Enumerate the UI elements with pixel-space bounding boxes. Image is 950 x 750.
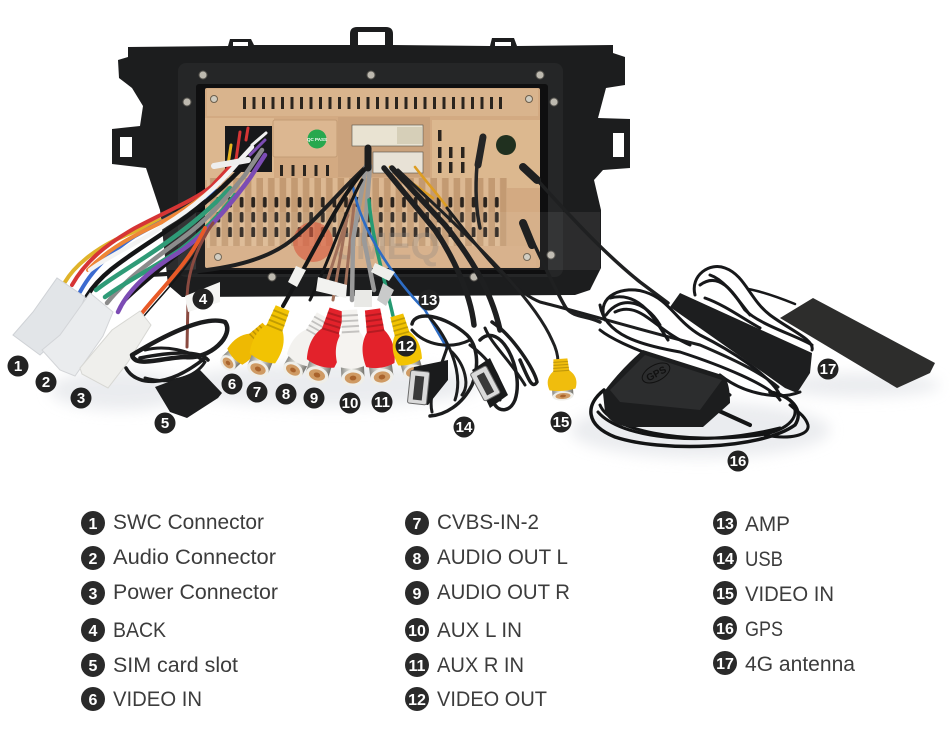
cable tags: [288, 263, 395, 307]
connector 2: Audio: [42, 293, 113, 376]
badge 15: 15: [553, 414, 569, 431]
GPS socket plug: [478, 137, 483, 165]
legend 2: 2: [89, 551, 98, 568]
badge 17: [818, 358, 838, 380]
USB coils: [412, 316, 537, 416]
legend 12: VIDEO OUT: [437, 688, 547, 711]
badge 17: 17: [820, 361, 836, 378]
blue wire: [353, 187, 447, 348]
plug 6 yellow: [215, 318, 275, 376]
yellow wires: [390, 167, 447, 207]
badge 7: [246, 382, 268, 402]
watermark band: [147, 212, 600, 270]
legend 14: USB: [745, 548, 783, 571]
connector 3: Power: [80, 311, 151, 388]
plug 11 red: [357, 307, 399, 387]
plug 10 white: [334, 309, 369, 387]
badge 6: 6: [228, 376, 236, 393]
legend 3: Power Connector: [113, 581, 278, 604]
GPS mark: [639, 359, 673, 387]
legend 4: 4: [89, 623, 98, 640]
grey wires: [352, 166, 374, 300]
legend 1: SWC Connector: [113, 511, 264, 534]
white plug lower: [373, 152, 423, 173]
4G coil and lead: [694, 267, 812, 350]
tag: [185, 282, 220, 312]
legend 4: BACK: [113, 619, 166, 642]
badge 6: [222, 374, 242, 394]
coil: [126, 321, 227, 381]
top vent slots: [243, 97, 502, 109]
left connector panel: [205, 118, 274, 180]
legend 14: [713, 546, 783, 571]
badge 2: [36, 372, 56, 392]
watermark word: JMEQ: [336, 226, 440, 268]
badge 13: [418, 290, 440, 310]
badge 1: [8, 356, 28, 376]
watermark logo: [293, 222, 333, 262]
legend 8: AUDIO OUT L: [437, 546, 568, 569]
badge 2: 2: [42, 374, 50, 391]
badge 10: 10: [342, 395, 358, 412]
badge 3: 3: [77, 390, 85, 407]
socket wires: [236, 128, 248, 160]
badge 7: 7: [253, 384, 261, 401]
gold rear chassis: [205, 88, 540, 268]
plastic bracket: [112, 27, 630, 297]
badge 5: [154, 412, 176, 434]
plug 15 yellow video in: [546, 358, 578, 401]
antenna pod: [155, 370, 222, 418]
legend 16: [713, 616, 783, 641]
legend 16: GPS: [745, 618, 783, 641]
badge 11: [372, 392, 392, 412]
lead to yellow plug 15: [398, 170, 558, 362]
GPS pod top: [610, 355, 722, 410]
legend 5: 5: [89, 658, 98, 675]
badge 9: [304, 388, 324, 408]
badge 8: 8: [282, 386, 290, 403]
rib slots: [210, 197, 504, 237]
legend column 2: [405, 511, 570, 711]
badge 5: 5: [161, 415, 169, 432]
4G antenna bar: [670, 293, 812, 393]
GPS mark: GPS: [645, 364, 669, 384]
legend 11: AUX R IN: [437, 654, 524, 677]
green QC sticker: [307, 130, 327, 148]
tag on video cable: [288, 266, 306, 287]
tag on grey wire: [354, 290, 372, 307]
badge 12: 12: [398, 338, 414, 355]
white plug upper: [352, 125, 423, 146]
badge 1: 1: [14, 358, 22, 375]
black lead to second plug: [310, 180, 362, 300]
antenna cable lower: [527, 230, 600, 322]
GPS coil: [591, 390, 808, 446]
legend 11: [405, 653, 524, 677]
right panel: [432, 120, 540, 188]
legend 3: 3: [89, 586, 98, 603]
tie bundle: [364, 148, 372, 168]
legend 10: 10: [408, 623, 426, 640]
USB 1 plug: [407, 360, 448, 405]
legend 13: AMP: [745, 513, 790, 536]
badge 10: [340, 392, 360, 414]
badge 13: 13: [421, 292, 437, 309]
legend 2: Audio Connector: [113, 546, 276, 569]
plug 9 red: [299, 305, 352, 388]
legend 17: 17: [716, 656, 734, 673]
badge 4: [192, 288, 214, 310]
number badges on photo: [8, 288, 838, 472]
sticker panel: [273, 120, 337, 157]
legend 15: VIDEO IN: [745, 583, 834, 606]
recess: [196, 84, 548, 274]
legend 5: SIM card slot: [113, 654, 238, 677]
antenna coils: [600, 290, 800, 400]
green wire: [369, 200, 393, 316]
floor shadows: [50, 363, 940, 458]
legend 15: [713, 581, 834, 606]
green QC sticker: QC PASS: [307, 137, 327, 142]
GPS pod: [603, 350, 730, 427]
legend 16: 16: [716, 621, 734, 638]
RCA plugs: [215, 302, 428, 388]
plug 12 yellow: [384, 312, 428, 383]
head unit frame: [112, 27, 630, 297]
white plug socket: [397, 127, 422, 144]
tag on green wire: [377, 283, 394, 306]
inner bezel: [178, 63, 563, 277]
badge 14: [454, 416, 474, 438]
antenna cable upper: [530, 172, 668, 303]
legend 10: AUX L IN: [437, 619, 522, 642]
bottom strip: [210, 246, 536, 267]
plug 7 yellow: [241, 302, 297, 382]
corner screws: [210, 96, 532, 260]
chassis plate: [205, 88, 540, 268]
badge 16: 16: [730, 453, 746, 470]
legend 11: 11: [409, 658, 426, 675]
badge 15: [550, 412, 572, 432]
bezel screws: [183, 71, 558, 281]
legend column 1: [81, 511, 278, 711]
legend 15: 15: [716, 586, 734, 603]
badge 8: [276, 384, 296, 404]
4G flat antenna: [780, 298, 935, 388]
badge 4: 4: [199, 291, 208, 308]
SIM antenna with coil: [126, 282, 227, 418]
connector 1: SWC: [13, 278, 85, 355]
legend 13: 13: [716, 516, 734, 533]
legend 4: [81, 618, 166, 642]
antenna cable upper plug: [523, 167, 537, 180]
legend 6: [81, 687, 202, 711]
small vents: [280, 130, 464, 176]
rib block: [207, 178, 507, 248]
legend 7: 7: [413, 516, 422, 533]
USB 2 plug: [470, 358, 508, 408]
legend 8: 8: [413, 551, 422, 568]
legend 14: 14: [716, 551, 734, 568]
AUX tag: [316, 277, 347, 298]
badge 3: [70, 388, 92, 408]
legend 6: VIDEO IN: [113, 688, 202, 711]
plug 8 white: [277, 309, 336, 384]
legend 9: 9: [413, 586, 422, 603]
legend 7: CVBS-IN-2: [437, 511, 539, 534]
wiring harness: [65, 128, 266, 347]
legend 12: 12: [408, 692, 426, 709]
black lead to yellow plug: [283, 166, 368, 306]
cable tie: [214, 160, 248, 166]
legend 1: 1: [89, 516, 98, 533]
GPS-end cable: [476, 165, 480, 228]
badge 11: 11: [374, 394, 390, 411]
brown wires: [326, 200, 354, 300]
USB cables: [407, 316, 537, 416]
radio socket: [496, 135, 516, 155]
tag on blue wire: [371, 263, 395, 281]
legend 13: [713, 511, 790, 536]
thick black lead to USB: [384, 168, 474, 325]
badge 14: 14: [456, 419, 473, 436]
legend 9: AUDIO OUT R: [437, 581, 570, 604]
centre panel: [338, 117, 430, 177]
legend 10: [405, 618, 522, 642]
legend column 3: [713, 511, 855, 676]
badge 12: [396, 336, 416, 356]
top strip: [207, 89, 538, 116]
GPS antenna: [591, 350, 808, 446]
black curve to the left: [150, 165, 368, 275]
legend 17: 4G antenna: [745, 653, 855, 676]
legend 6: 6: [89, 692, 98, 709]
badge 9: 9: [310, 390, 318, 407]
antenna cable lower plug: [523, 223, 532, 245]
thick black lead to USB 2: [392, 168, 500, 330]
mounting holes: [120, 32, 624, 157]
harness socket: [225, 126, 272, 172]
badge 16: [728, 450, 748, 472]
cables from back panel: [150, 137, 778, 387]
